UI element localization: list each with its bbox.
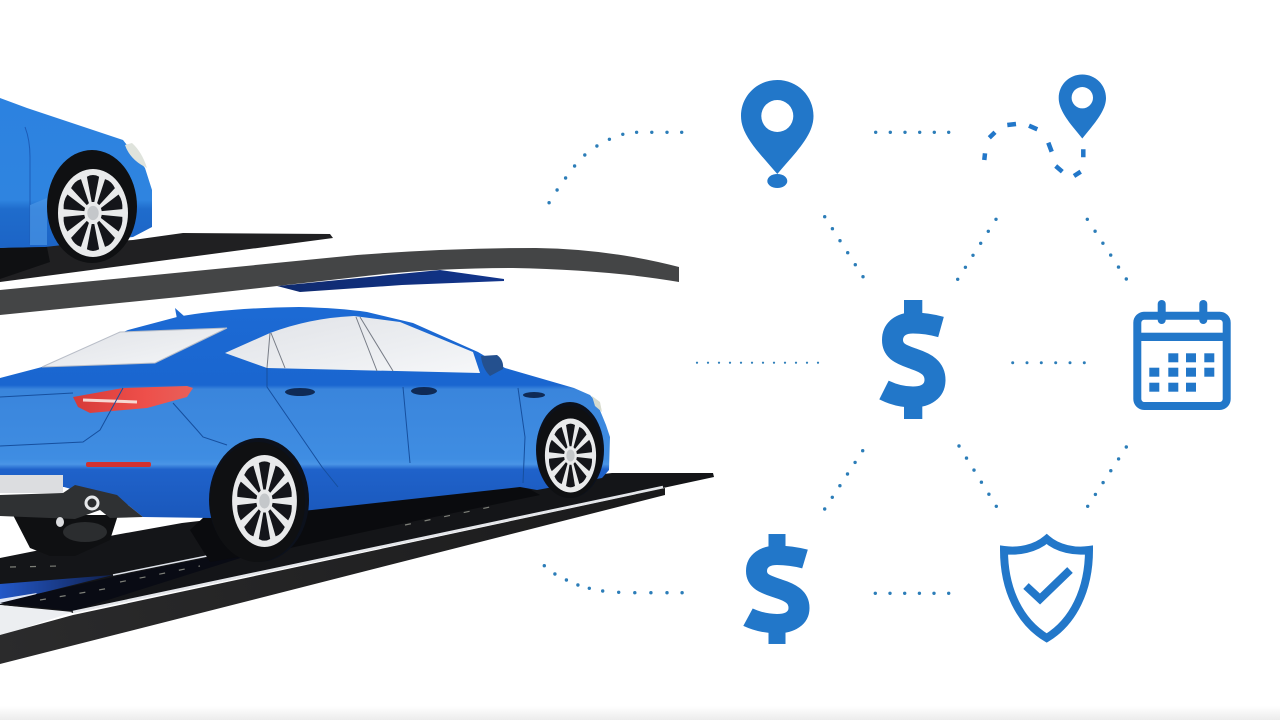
connector: top left arc xyxy=(547,131,683,204)
under-car shadow xyxy=(190,486,540,562)
roof antenna xyxy=(175,308,184,319)
connector: top row xyxy=(874,131,950,134)
car body xyxy=(0,307,610,518)
ramp plate xyxy=(0,555,250,611)
main blue car xyxy=(0,307,610,562)
rear reflector xyxy=(86,462,151,467)
rear window xyxy=(42,328,227,367)
ramp tread marks xyxy=(10,507,490,600)
icon: route pin with dashed path xyxy=(984,74,1106,176)
navy underside xyxy=(277,270,504,292)
pale strip under blue xyxy=(0,593,37,604)
upper car body xyxy=(0,98,152,248)
connector: centre to shield xyxy=(957,444,998,508)
ramp white line xyxy=(73,487,663,612)
dashed route xyxy=(984,124,1083,176)
ramp highlights xyxy=(113,492,520,575)
light ramp panel xyxy=(0,605,73,636)
icon: centre dollar xyxy=(884,300,941,419)
upper ramp xyxy=(0,233,333,282)
connector: calendar to shield xyxy=(1086,445,1128,508)
connector: centre to lower dollar xyxy=(823,449,864,511)
bumper stud xyxy=(56,517,64,527)
blue reflection strip xyxy=(0,575,113,600)
ramp top surface xyxy=(0,473,714,613)
window pillars xyxy=(267,317,393,371)
rear differential xyxy=(63,522,107,542)
front headlight xyxy=(592,396,602,412)
icon: large location pin xyxy=(741,80,814,188)
panel lines xyxy=(0,368,525,487)
connector: middle right xyxy=(1011,361,1086,364)
floor shadow strip xyxy=(0,706,1280,720)
rear arch xyxy=(209,438,309,562)
upper car on ramp xyxy=(0,98,333,282)
front wheel xyxy=(538,406,602,498)
connector: middle left xyxy=(696,362,819,364)
tail light xyxy=(73,386,193,413)
exhaust xyxy=(84,496,100,510)
front arch xyxy=(536,402,604,498)
rear wheel xyxy=(210,442,305,562)
lower ramp xyxy=(0,473,714,664)
licence plate xyxy=(0,475,63,493)
connector: route to centre xyxy=(956,218,998,281)
connector: bottom left arc xyxy=(543,564,684,594)
rear bumper xyxy=(0,485,143,519)
side windows xyxy=(225,316,480,373)
small location pin xyxy=(1059,74,1106,138)
icon: calendar xyxy=(1135,300,1229,406)
side mirror xyxy=(481,355,503,376)
tail light stripe xyxy=(83,400,137,402)
far rear wheel xyxy=(13,515,118,556)
dotted connectors xyxy=(543,131,1128,595)
icon: shield with check xyxy=(1004,539,1089,638)
upper car front wheel xyxy=(47,150,137,263)
upper car underside xyxy=(0,247,50,279)
curved band xyxy=(0,248,679,315)
upper car door line xyxy=(25,127,30,243)
connector: bottom row xyxy=(874,592,950,595)
door handles xyxy=(285,387,545,398)
curved middle ramp xyxy=(0,248,679,315)
connector: route to calendar xyxy=(1086,218,1128,281)
upper car fender light xyxy=(30,198,47,245)
ramp thick edge xyxy=(0,488,665,664)
upper car headlight xyxy=(125,143,147,168)
icon: lower dollar xyxy=(748,534,805,644)
connector: pin to centre xyxy=(823,215,865,278)
